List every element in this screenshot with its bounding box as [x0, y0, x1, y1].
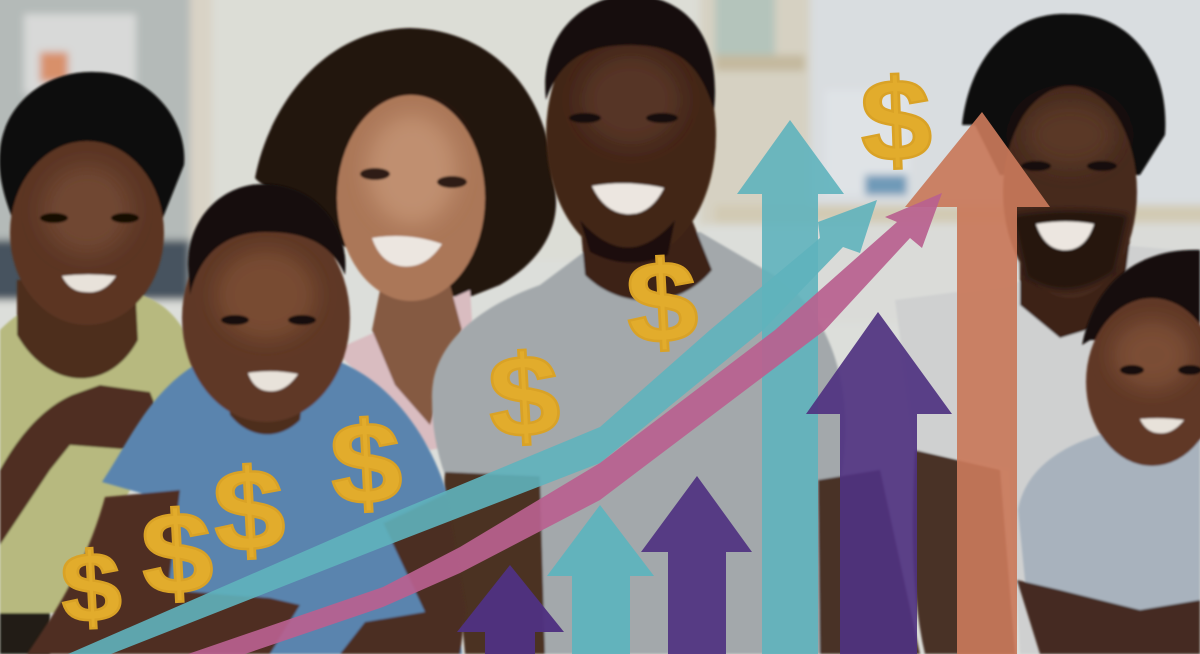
dollar signs: [58, 54, 934, 643]
arrow: large purple: [806, 312, 952, 654]
right man facial features: [1021, 161, 1117, 250]
chart: rising growth arrows: [68, 112, 1050, 654]
person: woman with curly hair: [255, 28, 556, 450]
person: boy in yellow shirt: [0, 72, 198, 654]
trend line: teal: [68, 200, 877, 654]
trend line: pink: [188, 193, 942, 654]
woman facial features: [360, 168, 467, 267]
girl facial features: [1120, 365, 1200, 433]
icon: dollar sign 1: $: [58, 531, 124, 643]
icon: dollar sign 7: $: [858, 54, 934, 186]
arrow: tall teal: [737, 120, 844, 654]
arrow: small purple: [457, 565, 564, 654]
icon: dollar sign 4: $: [327, 397, 405, 530]
arrow: medium purple: [641, 476, 752, 654]
icon: dollar sign 3: $: [210, 444, 288, 577]
toddler facial features: [221, 315, 316, 391]
boy facial features: [40, 213, 139, 292]
icon: dollar sign 5: $: [485, 330, 563, 463]
person: man at right: [895, 14, 1200, 654]
arrow: tall orange: [905, 112, 1050, 654]
man facial features: [569, 113, 678, 263]
arrow: medium teal: [547, 505, 654, 654]
person: little girl at right: [1017, 250, 1200, 654]
person: toddler in blue denim shirt: [27, 184, 466, 654]
icon: dollar sign 6: $: [623, 236, 701, 369]
person: man in grey t-shirt: [432, 0, 920, 654]
icon: dollar sign 2: $: [138, 487, 216, 620]
